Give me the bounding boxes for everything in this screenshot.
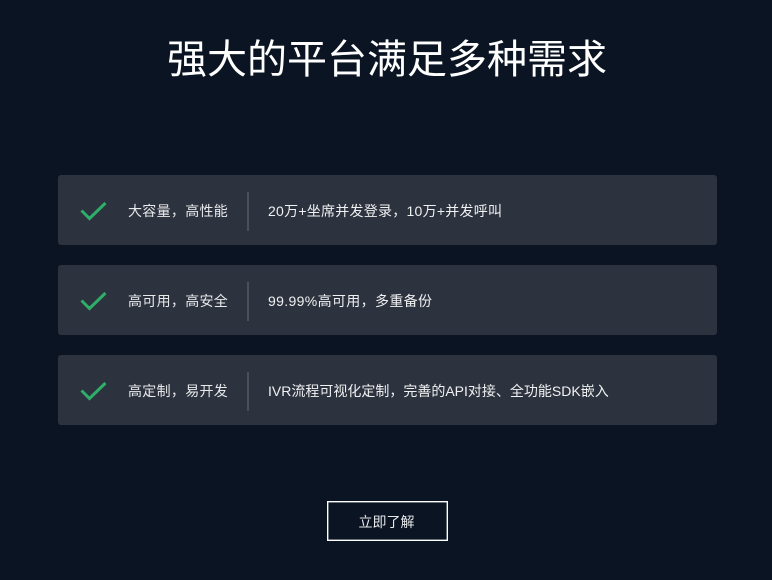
title: 强大的平台满足多种需求 <box>167 38 607 82</box>
feature description: 20万+坐席并发登录，10万+并发呼叫 <box>268 203 502 219</box>
icon: check mark <box>80 382 106 400</box>
feature name: 高可用，高安全 <box>128 293 228 309</box>
panel: customization <box>58 355 717 425</box>
feature description: 99.99%高可用，多重备份 <box>268 293 432 309</box>
feature description: IVR流程可视化定制，完善的API对接、全功能SDK嵌入 <box>268 383 609 399</box>
feature name: 高定制，易开发 <box>128 383 228 399</box>
panel: capacity <box>58 175 717 245</box>
feature name: 大容量，高性能 <box>128 203 228 219</box>
icon: check mark <box>80 292 106 310</box>
button: learn more <box>327 501 448 541</box>
button: learn more: 立即了解 <box>358 514 414 530</box>
icon: check mark <box>80 202 106 220</box>
panel: availability <box>58 265 717 335</box>
